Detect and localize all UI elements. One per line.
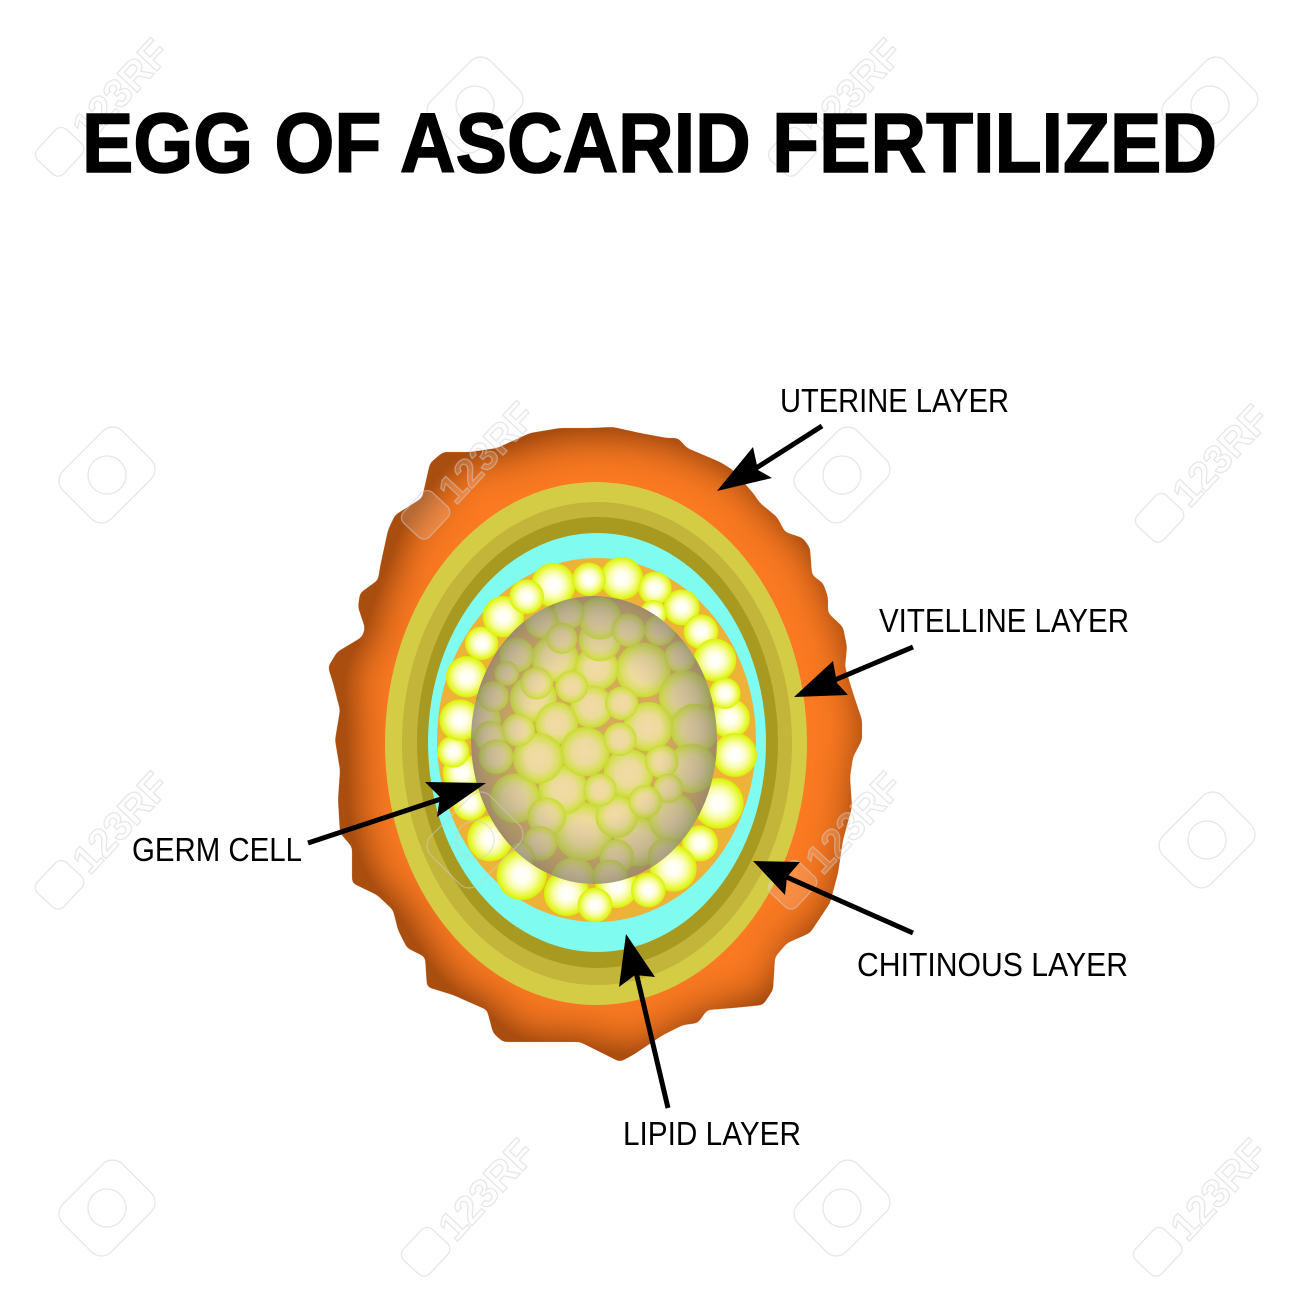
label: chitinous layer: CHITINOUS LAYER (857, 946, 1128, 983)
egg diagram (328, 427, 862, 1062)
label: uterine layer: UTERINE LAYER (780, 382, 1009, 419)
arrow: lipid layer (619, 934, 668, 1108)
arrow: vitelline layer (794, 647, 913, 697)
watermark: 123RF repeated: 123RF (1162, 1131, 1276, 1249)
watermark: 123RF repeated: 123RF (430, 394, 544, 512)
uterine layer: outer scalloped shell (328, 427, 862, 1062)
watermark: 123RF repeated: 123RF (1164, 397, 1278, 515)
watermark: 123RF repeated: 123RF (430, 1131, 544, 1249)
watermark: 123RF repeated: 123RF (64, 31, 178, 149)
watermark: 123RF repeated: 123RF (797, 764, 911, 882)
arrow: chitinous layer (753, 861, 913, 933)
arrow: germ cell (308, 782, 486, 843)
watermark: 123RF repeated: 123RF (64, 764, 178, 882)
germ cell: nucleus with blastomeres (471, 596, 717, 884)
label: lipid layer: LIPID LAYER (623, 1115, 801, 1152)
pearl ring of granules (437, 557, 757, 922)
watermark: 123RF repeated: 123RF (797, 31, 911, 149)
title: EGG OF ASCARID FERTILIZED (82, 96, 1217, 190)
lipid layer: cyan ring (428, 533, 766, 952)
vitelline layer rings (385, 482, 807, 1005)
arrow: uterine layer (717, 426, 822, 491)
label: vitelline layer: VITELLINE LAYER (879, 602, 1129, 639)
label: germ cell: GERM CELL (132, 831, 302, 868)
perivitelline space (437, 558, 756, 922)
